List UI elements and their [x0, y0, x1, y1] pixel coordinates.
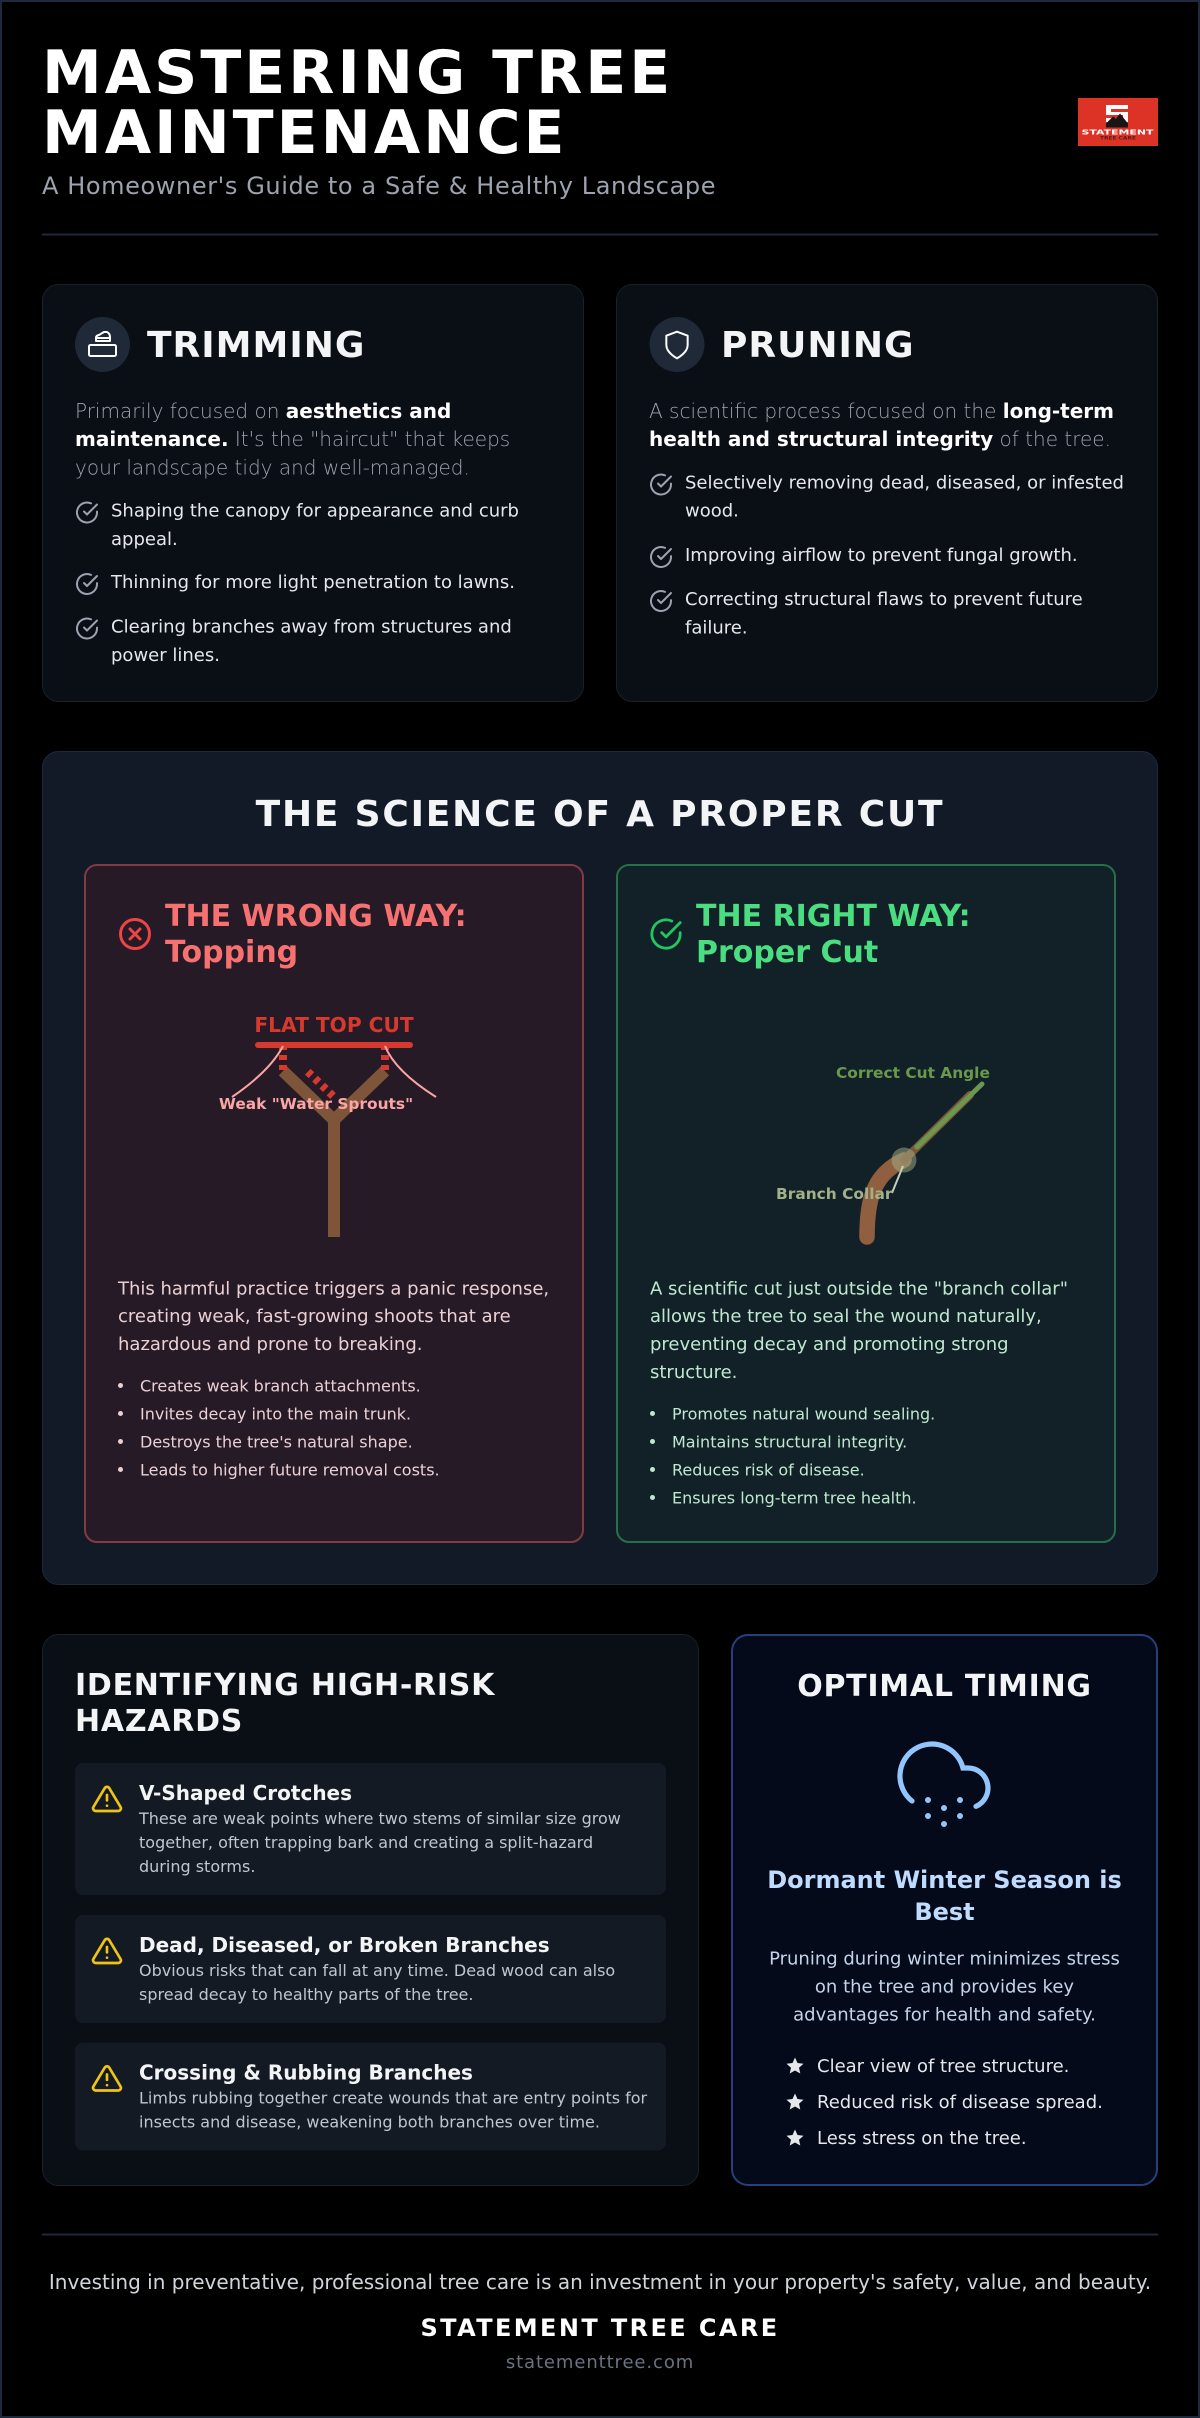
footer: closing statement: Investing in preventative, professional tree care is an investment in your property's safety, value, and beauty. — [49, 2270, 1151, 2294]
subheading: dormant winter: Best — [914, 1898, 975, 1926]
diagram: proper cut: Correct Cut Angle — [836, 1064, 990, 1082]
list: right way bullets: Reduces risk of disease. — [672, 1460, 865, 1480]
heading: wrong way: Topping — [165, 935, 298, 970]
icon: warning — [93, 2066, 121, 2090]
heading: wrong way: THE WRONG WAY: — [165, 899, 467, 934]
text: pruning intro: A scientific process focused on the long-term — [649, 399, 1114, 423]
panel: optimal timing — [732, 1635, 1157, 2185]
list: timing benefits: Clear view of tree structure. — [817, 2056, 1069, 2077]
hazard: v-shaped crotches: during storms. — [139, 1857, 255, 1876]
hazard: crossing and rubbing branches: insects and disease, weakening both branches over time. — [139, 2112, 600, 2132]
title: MASTERING TREE — [42, 38, 673, 108]
text: right way description: structure. — [650, 1362, 737, 1383]
list: trimming — [77, 500, 519, 666]
list: trimming: appeal. — [111, 529, 178, 550]
icon: pruning — [650, 317, 704, 372]
list: trimming: Clearing branches away from structures and — [111, 616, 512, 638]
check icon 1 — [651, 474, 671, 494]
hazard: dead, diseased, or broken branches — [75, 1915, 666, 2023]
heading: hazards: IDENTIFYING HIGH-RISK — [75, 1668, 496, 1703]
logo: TREE CARE — [1100, 136, 1136, 140]
heading: pruning: PRUNING — [721, 325, 915, 366]
check icon 2 — [651, 547, 671, 567]
text: trimming intro: maintenance. It's the "haircut" that keeps — [75, 427, 510, 451]
heading: right way: THE RIGHT WAY: — [696, 899, 971, 934]
heading: hazards: HAZARDS — [75, 1704, 243, 1739]
subheading: dormant winter — [767, 1866, 1122, 1926]
title: MAINTENANCE — [42, 98, 567, 168]
subtitle: A Homeowner's Guide to a Safe & Healthy Landscape — [42, 172, 716, 200]
hazard: crossing and rubbing branches — [75, 2042, 666, 2150]
text: timing description: on the tree and provides key — [815, 1976, 1074, 1998]
hazard: v-shaped crotches: These are weak points where two stems of similar size grow — [138, 1809, 621, 1828]
panel: identifying high-risk hazards — [42, 1634, 698, 2186]
text: wrong way description — [117, 1278, 549, 1355]
list: trimming: Shaping the canopy for appearance and curb — [111, 500, 519, 522]
heading: science: THE SCIENCE OF A PROPER CUT — [256, 794, 944, 835]
list: pruning: Correcting structural flaws to prevent future — [685, 589, 1083, 610]
text: trimming intro: Primarily focused on aesthetics and — [75, 399, 451, 423]
logo — [1078, 98, 1158, 146]
hazard: crossing and rubbing branches: Limbs rubbing together create wounds that are entry points for — [139, 2088, 648, 2108]
panel: pruning — [616, 284, 1158, 702]
hazard: v-shaped crotches: together, often trapping bark and creating a split-hazard — [139, 1833, 593, 1852]
hazard: dead, diseased, or broken branches: Obvious risks that can fall at any time. Dead wood can also — [139, 1961, 615, 1980]
logo: STATEMENT — [1082, 128, 1154, 136]
diagram: topped tree — [219, 1013, 436, 1237]
heading: trimming: TRIMMING — [147, 325, 365, 366]
footer: company name: STATEMENT TREE CARE — [420, 2314, 780, 2342]
list: timing benefits — [786, 2056, 1103, 2149]
list: trimming: Thinning for more light penetration to lawns. — [110, 572, 515, 593]
subheading: dormant winter: Dormant Winter Season is — [767, 1866, 1122, 1894]
text: wrong way description: creating weak, fast-growing shoots that are — [118, 1306, 511, 1327]
list: wrong way bullets: Invites decay into the main trunk. — [140, 1404, 411, 1424]
heading: timing: OPTIMAL TIMING — [797, 1669, 1092, 1704]
list: timing benefits: Reduced risk of disease spread. — [817, 2092, 1103, 2113]
list: pruning: wood. — [685, 500, 739, 522]
list: pruning — [651, 472, 1124, 638]
check icon 3 — [77, 618, 97, 638]
heading: right way — [696, 899, 971, 970]
panel: the wrong way — [85, 865, 583, 1542]
panel: trimming — [42, 284, 584, 702]
text: wrong way description: hazardous and prone to breaking. — [118, 1334, 422, 1355]
text: right way description — [650, 1278, 1068, 1383]
list: wrong way bullets — [118, 1376, 440, 1480]
list: wrong way bullets: Leads to higher future removal costs. — [140, 1460, 440, 1480]
icon: warning — [93, 1939, 121, 1963]
list: wrong way bullets: Destroys the tree's natural shape. — [140, 1432, 413, 1452]
text: timing description — [769, 1948, 1120, 2026]
list: timing benefits: Less stress on the tree. — [817, 2128, 1027, 2149]
icon: snow cloud — [900, 1744, 988, 1827]
list: right way bullets: Maintains structural integrity. — [672, 1432, 907, 1452]
hazard: v-shaped crotches — [75, 1763, 666, 1895]
hazard: dead, diseased, or broken branches: Dead, Diseased, or Broken Branches — [139, 1933, 550, 1957]
list: pruning: failure. — [685, 618, 748, 638]
icon: warning — [93, 1787, 121, 1811]
heading: hazards — [75, 1668, 496, 1739]
panel: the right way — [617, 865, 1115, 1542]
list: wrong way bullets: Creates weak branch attachments. — [140, 1376, 421, 1396]
diagram: topped tree: Weak "Water Sprouts" — [219, 1095, 413, 1113]
hazard: crossing and rubbing branches: Crossing & Rubbing Branches — [139, 2060, 473, 2084]
hazard: dead, diseased, or broken branches: spread decay to healthy parts of the tree. — [139, 1985, 473, 2004]
text: timing description: Pruning during winter minimizes stress — [769, 1948, 1120, 1970]
list: pruning: Selectively removing dead, diseased, or infested — [685, 472, 1124, 494]
list: right way bullets: Promotes natural wound sealing. — [672, 1404, 935, 1424]
icon: x circle — [120, 920, 150, 948]
check icon 3 — [651, 591, 671, 611]
text: right way description: A scientific cut just outside the "branch collar" — [650, 1278, 1068, 1299]
text: right way description: preventing decay and promoting strong — [650, 1334, 1009, 1355]
list: right way bullets — [650, 1404, 935, 1508]
panel: the science of a proper cut — [42, 752, 1158, 1584]
text: timing description: advantages for health and safety. — [793, 2004, 1096, 2026]
text: right way description: allows the tree to seal the wound naturally, — [650, 1306, 1042, 1327]
icon: trimming — [75, 317, 130, 372]
text: pruning intro — [649, 399, 1114, 451]
hazard: v-shaped crotches: V-Shaped Crotches — [139, 1781, 352, 1805]
text: trimming intro: your landscape tidy and well-managed. — [75, 456, 470, 480]
title — [42, 38, 673, 168]
list: right way bullets: Ensures long-term tree health. — [672, 1488, 917, 1508]
footer: website: statementtree.com — [506, 2352, 694, 2373]
check icon 2 — [77, 574, 97, 594]
icon: check circle — [652, 920, 680, 948]
diagram: proper cut: Branch Collar — [776, 1185, 893, 1203]
heading: wrong way — [165, 899, 467, 970]
diagram: topped tree: FLAT TOP CUT — [254, 1013, 414, 1037]
text: trimming intro — [75, 399, 510, 480]
text: pruning intro: health and structural integrity of the tree. — [649, 427, 1111, 451]
diagram: proper cut — [776, 1064, 990, 1237]
heading: right way: Proper Cut — [696, 935, 878, 970]
list: pruning: Improving airflow to prevent fungal growth. — [685, 545, 1078, 566]
text: wrong way description: This harmful practice triggers a panic response, — [117, 1278, 549, 1299]
list: trimming: power lines. — [111, 645, 220, 666]
check icon 1 — [77, 502, 97, 522]
